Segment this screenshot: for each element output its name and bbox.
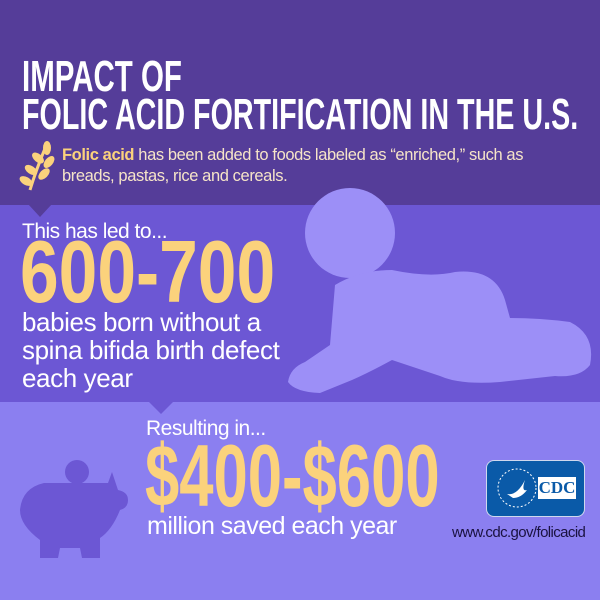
text: million saved: million saved each year [147,512,397,540]
band: middle [0,205,600,402]
text: intro: breads, pastas, rice and cereals. [62,167,287,185]
text: intro: Folic acid has been added to foods labeled as “enriched,” such as [62,146,523,164]
text: babies: spina bifida birth defect [22,335,279,365]
title: IMPACT OF [22,52,182,101]
title [22,52,578,139]
text: led to: This has led to... [22,220,167,243]
icon: piggy bank [20,460,128,558]
logo: CDC: CDC [539,478,575,497]
title: FOLIC ACID FORTIFICATION IN THE U.S. [22,90,578,139]
text: url: www.cdc.gov/folicacid [452,524,585,541]
logo: CDC [486,460,585,517]
text: intro [62,146,523,185]
band: top [0,0,600,205]
pointer: middle [149,402,173,414]
stat: $400-$600: $400-$600 [145,426,440,525]
stat: 600-700: 600-700 [20,222,275,321]
pointer: top [29,205,51,217]
text: babies: each year [22,363,133,393]
icon: wheat [20,141,54,190]
text: babies: babies born without a [22,307,261,337]
text: resulting in: Resulting in... [146,417,266,440]
text: babies [22,307,280,393]
